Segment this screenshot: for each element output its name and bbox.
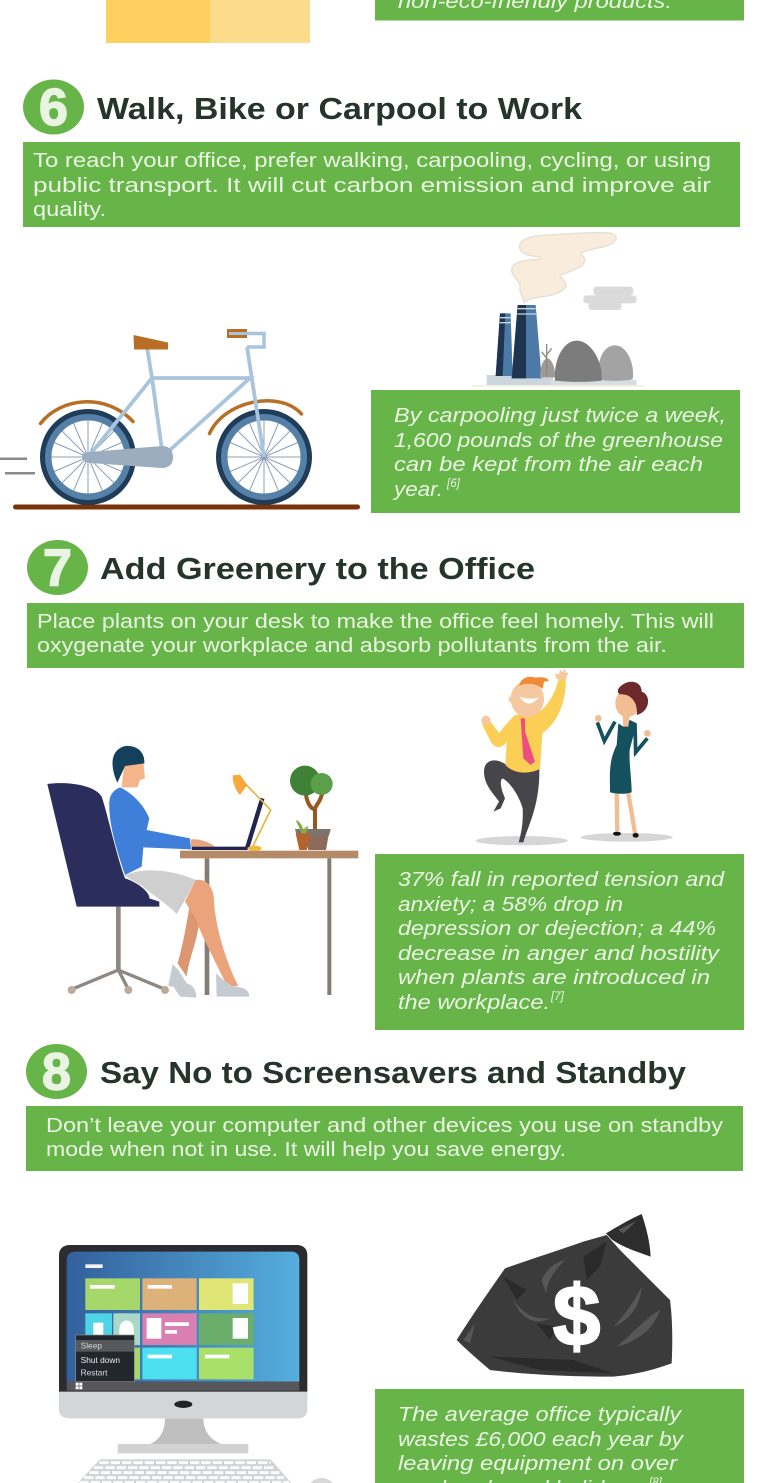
section 6 badge [23,79,84,137]
panel: section 8 callout: leaving equipment on over [398,1452,678,1475]
illustration: happy office workers [476,668,673,845]
illustration: factory with smoke [472,233,645,387]
bag body [457,1235,672,1377]
frame [88,334,264,457]
section 7 badge: 7 [43,540,72,598]
panel: section 7 callout: when plants are introduced in [398,966,710,989]
panel: section 6 description: To reach your office, prefer walking, carpooling, cycling, or using [33,149,711,172]
tiles [85,1264,254,1379]
panel: section 7 callout: decrease in anger and hostility [398,942,721,965]
panel: section 7 callout [375,854,744,1030]
power menu: Restart [81,1367,108,1377]
panel: section 7 callout: [7] [550,991,565,1003]
dollar sign: $ [553,1269,600,1364]
ground [487,375,553,385]
panel: section 7 callout: depression or dejection; a 44% [398,917,716,940]
power menu [76,1335,134,1382]
folds [463,1221,660,1347]
panel: section 7 description: Place plants on your desk to make the office feel homely. This will [37,610,714,633]
monitor body [59,1245,307,1393]
panel: section 6 callout: [6] [446,478,461,490]
illustration: black bag with dollar sign [457,1214,672,1377]
speed lines [0,458,35,474]
laptop [191,798,262,850]
chimneys [496,305,542,378]
panel: section 6 callout: 1,600 pounds of the greenhouse [394,429,723,452]
panel: section 7 callout: anxiety; a 58% drop in [398,893,623,916]
plant [290,766,333,850]
section 6 heading: Walk, Bike or Carpool to Work [97,91,583,126]
panel: section 8 callout: wastes £6,000 each year by [398,1428,685,1451]
knot [606,1214,651,1257]
start icon [76,1383,82,1389]
skirt [124,870,196,914]
sweater [109,787,191,875]
illustration: bicycle [0,329,360,510]
panel: section 6 callout: year. [392,478,443,501]
panel: section 8 callout [375,1389,744,1483]
panel: section 6 description: public transport. It will cut carbon emission and improve air [33,174,711,197]
woman [595,682,651,838]
stand [150,1418,222,1444]
screen [67,1252,299,1382]
chain guard [82,446,173,468]
illustration: desktop computer with sleep menu [59,1245,337,1483]
rocks [540,341,633,382]
panel: section 6 callout: can be kept from the air each [394,453,703,476]
panel: section 8 description [26,1106,743,1171]
section 7 badge [27,540,88,598]
panel: section 7 description [27,603,744,668]
saddle [134,335,168,350]
power menu: Shut down [81,1355,120,1365]
fenders [40,401,302,434]
panel: section 6 callout [371,390,740,513]
desk [205,858,331,995]
head [113,746,145,787]
power menu: Sleep [81,1340,102,1350]
panel: previous section callout [375,0,744,20]
panel: section 7 callout: 37% fall in reported tension and [398,868,725,891]
rear wheel [42,412,134,502]
shadows [476,833,673,845]
front wheel [218,412,310,502]
illustration: yellow box from previous section [106,0,310,43]
grip [227,329,247,338]
panel: section 7 description: oxygenate your workplace and absorb pollutants from the air. [37,634,667,657]
section 7 heading: Add Greenery to the Office [100,551,535,586]
panel: section 7 callout: the workplace. [398,991,550,1014]
chair [47,783,169,994]
panel: section 6 description: quality. [33,198,106,221]
section 8 badge: 8 [42,1044,71,1102]
section 8 heading: Say No to Screensavers and Standby [100,1055,687,1090]
illustration: woman working at desk [47,746,358,998]
section 8 badge [26,1044,87,1102]
ground [13,504,360,510]
smoke [512,233,616,303]
mouse [306,1478,337,1483]
section 6 badge: 6 [39,79,68,137]
panel: section 8 description: mode when not in use. It will help you save energy. [46,1138,566,1161]
panel: section 8 description: Don’t leave your computer and other devices you use on standby [46,1114,724,1137]
man [481,668,568,842]
panel: section 8 callout: The average office typically [398,1403,683,1426]
panel: section 6 description [23,142,740,227]
lamp [233,775,271,851]
legs and shoes [168,880,249,998]
grey cloud [583,287,637,310]
panel: section 6 callout: By carpooling just twice a week, [394,404,726,427]
keyboard [77,1459,292,1483]
